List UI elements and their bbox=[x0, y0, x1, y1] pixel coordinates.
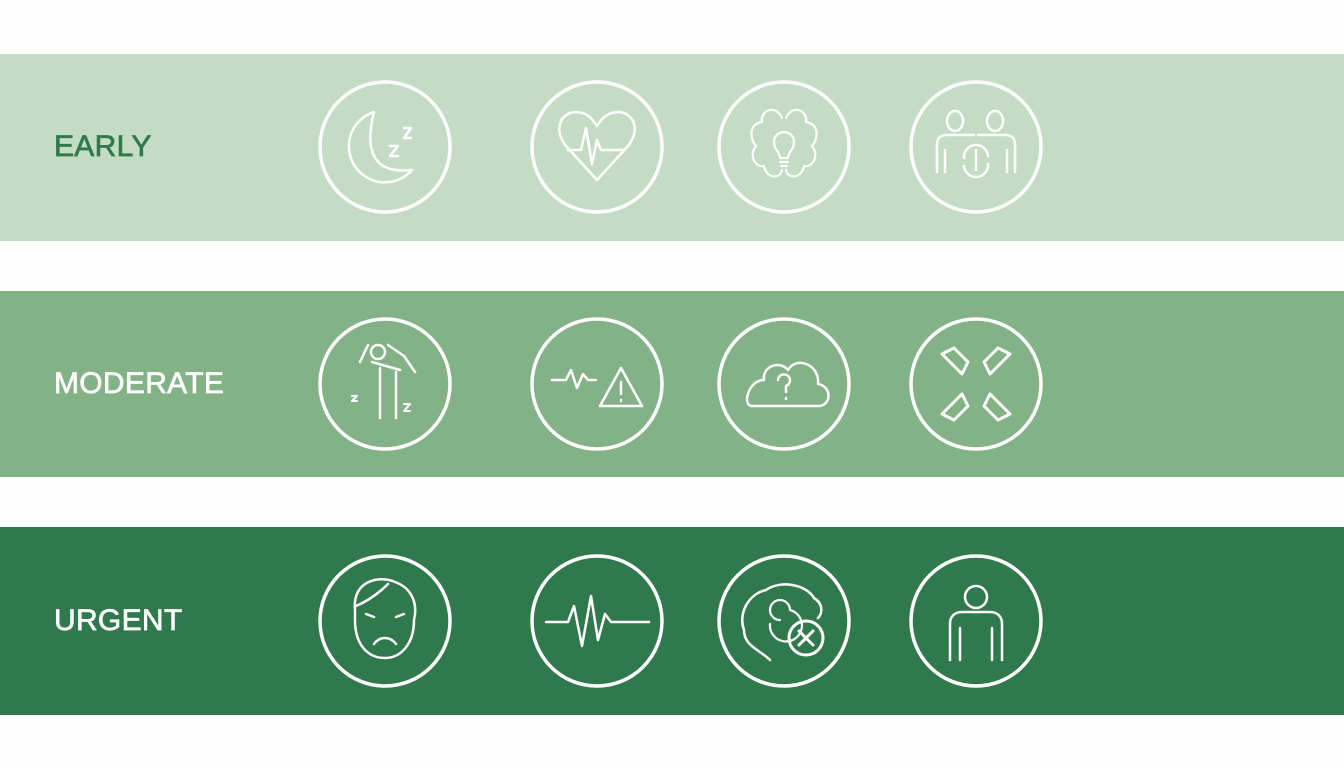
icon: two people bbox=[911, 82, 1041, 212]
icon: moon sleep bbox=[320, 82, 450, 212]
band: early bbox=[0, 54, 1344, 241]
icon: tired person bbox=[320, 319, 450, 449]
icon: brain bulb bbox=[719, 82, 849, 212]
icon: person bbox=[911, 556, 1041, 686]
label: urgent: URGENT bbox=[54, 604, 182, 637]
icon: cloud question bbox=[719, 319, 849, 449]
band: urgent bbox=[0, 527, 1344, 715]
band: moderate bbox=[0, 291, 1344, 477]
label: early: EARLY bbox=[54, 130, 152, 163]
label: moderate: MODERATE bbox=[54, 367, 224, 400]
icon: heart pulse bbox=[532, 82, 662, 212]
icon: brain with x bbox=[719, 556, 849, 686]
icon: sad face bbox=[320, 556, 450, 686]
icon: ecg bbox=[532, 556, 662, 686]
icon: pulse warning bbox=[532, 319, 662, 449]
icon: broken links bbox=[911, 319, 1041, 449]
